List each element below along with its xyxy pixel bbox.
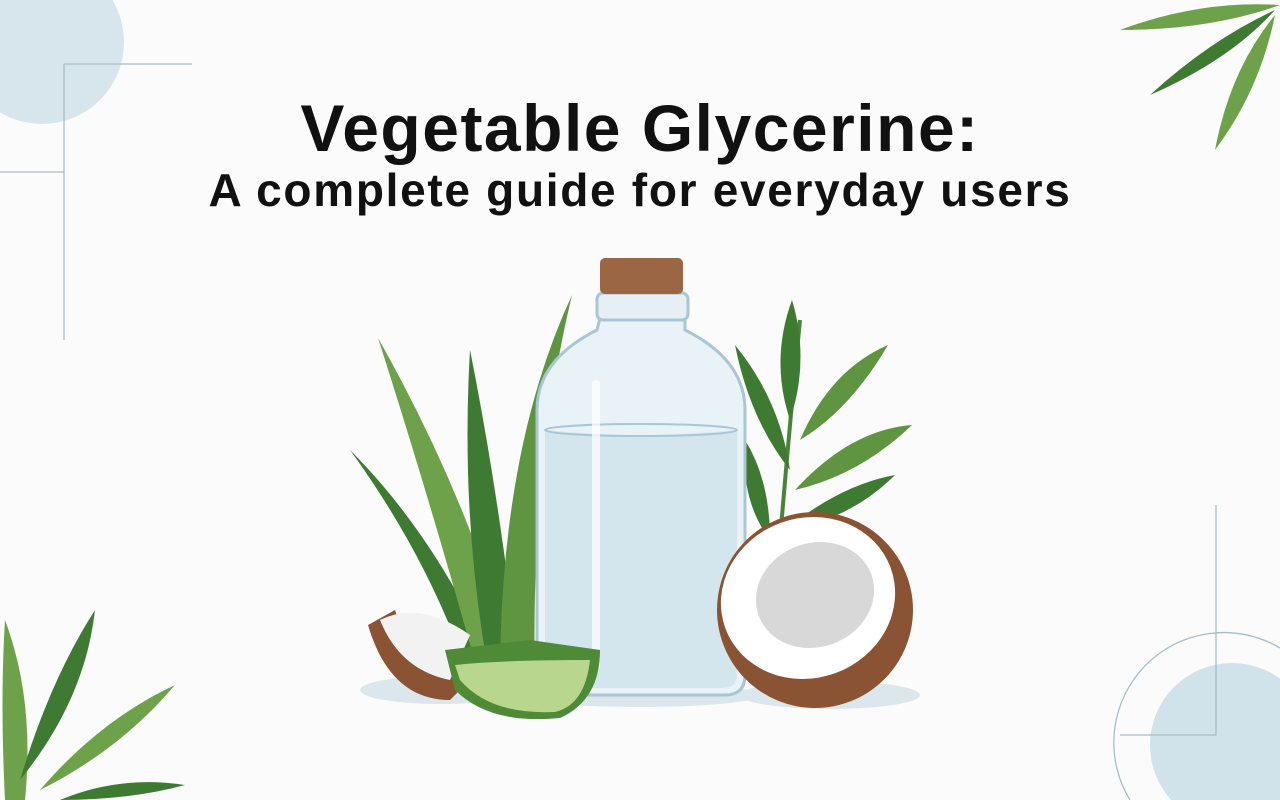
shadows [360,676,920,709]
bottom-right circle [1114,505,1280,800]
coconut left [368,610,470,700]
bottle [537,258,745,695]
bottom-left leaves [2,610,185,800]
coconut right [698,493,918,708]
aloe slice [445,640,600,719]
top-right leaves [1120,4,1280,150]
top-left circle [0,0,192,340]
right branch [735,300,912,540]
subtitle: A complete guide for everyday users [208,164,1072,216]
title: Vegetable Glycerine: [300,91,980,165]
aloe leaves [350,295,572,680]
